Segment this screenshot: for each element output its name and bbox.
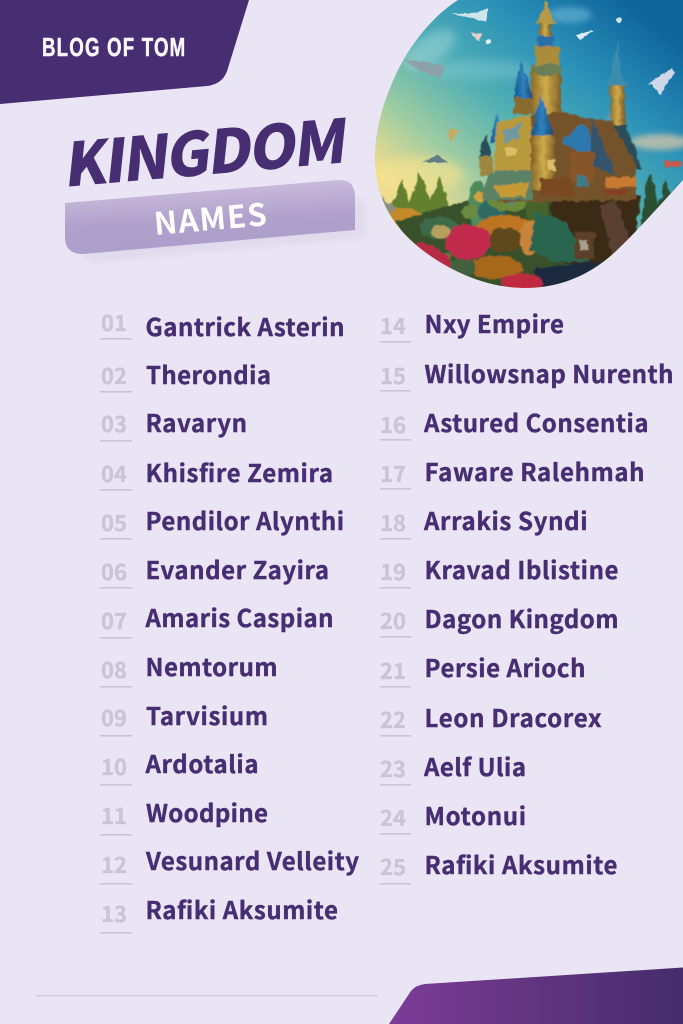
far trees (390, 172, 449, 228)
item 17: 17 (380, 457, 406, 489)
mid ground (395, 199, 642, 288)
item 03: 03 (101, 407, 127, 439)
item 10: 10 (101, 750, 127, 782)
item 13 (100, 891, 338, 934)
item 02: Therondia (146, 356, 271, 391)
blue side roof (562, 124, 592, 153)
item 21: Persie Arioch (424, 649, 586, 684)
right distant trees (640, 174, 679, 226)
item 07: Amaris Caspian (144, 599, 334, 634)
top-left brand banner (0, 0, 249, 104)
item 19: 19 (380, 555, 406, 587)
item 12 (100, 842, 359, 885)
item 23: 23 (380, 752, 406, 784)
item 24: Motonui (424, 797, 526, 832)
item 25: 25 (380, 850, 406, 882)
item 10: Ardotalia (144, 745, 258, 780)
left cones (514, 60, 533, 98)
item 08: 08 (101, 653, 127, 685)
item 16: Astured Consentia (423, 404, 648, 439)
main tower (534, 0, 556, 24)
item 16: 16 (380, 408, 406, 440)
item 08 (100, 648, 278, 688)
item 11: 11 (101, 799, 127, 831)
item 03 (100, 404, 247, 442)
item 02: 02 (101, 359, 127, 391)
item 04: 04 (101, 457, 127, 489)
item 15: 15 (380, 359, 406, 391)
item 02 (100, 356, 271, 393)
castle right spire (606, 40, 628, 86)
castle body (495, 112, 636, 202)
item 20: Dagon Kingdom (424, 600, 618, 635)
item 08: Nemtorum (146, 648, 278, 683)
item 18: Arrakis Syndi (423, 502, 588, 537)
item 15: Willowsnap Nurenth (424, 355, 674, 390)
flying creatures (405, 8, 675, 163)
item 24: 24 (380, 801, 406, 833)
item 04: Khisfire Zemira (146, 454, 333, 489)
item 09: Tarvisium (146, 697, 268, 732)
item 12: 12 (101, 848, 127, 880)
item 22: Leon Dracorex (424, 699, 602, 734)
item 09 (100, 697, 268, 737)
centre cone and tower (532, 134, 555, 190)
item 05: 05 (101, 506, 127, 538)
item 10 (100, 745, 258, 786)
item 07: 07 (101, 604, 127, 636)
item 22: 22 (380, 703, 406, 735)
item 20: 20 (380, 604, 406, 636)
item 13: 13 (101, 897, 127, 929)
item 23: Aelf Ulia (423, 748, 526, 783)
title: KINGDOM: KINGDOM (62, 93, 353, 205)
item 14: 14 (380, 309, 406, 341)
item 17: Faware Ralehmah (424, 453, 644, 488)
item 12: Vesunard Velleity (145, 842, 359, 877)
item 05: Pendilor Alynthi (146, 502, 344, 537)
item 11 (100, 794, 268, 836)
illustration: fantasy castle in a blob frame (370, 0, 683, 295)
item 06: 06 (101, 555, 127, 587)
item 01: Gantrick Asterin (146, 308, 344, 343)
list: right column (380, 305, 674, 885)
subtitle banner: NAMES (65, 180, 366, 263)
brand name: BLOG OF TOM (42, 32, 185, 62)
item 18: 18 (380, 506, 406, 538)
item 09: 09 (101, 701, 127, 733)
subtitle text: NAMES (152, 189, 268, 244)
footer corner shape (389, 968, 683, 1024)
red flowers (445, 224, 491, 260)
footer rule (36, 995, 378, 996)
item 13: Rafiki Aksumite (146, 891, 338, 926)
item 06: Evander Zayira (146, 551, 329, 586)
item 03: Ravaryn (146, 404, 247, 439)
item 01: 01 (101, 306, 127, 338)
item 23 (380, 748, 526, 786)
item 21: 21 (380, 654, 406, 686)
item 19: Kravad Iblistine (424, 551, 618, 586)
list: left column (100, 306, 359, 934)
item 11: Woodpine (146, 794, 268, 829)
item 14: Nxy Empire (424, 305, 564, 340)
item 25: Rafiki Aksumite (424, 846, 618, 881)
item 24 (380, 797, 526, 835)
